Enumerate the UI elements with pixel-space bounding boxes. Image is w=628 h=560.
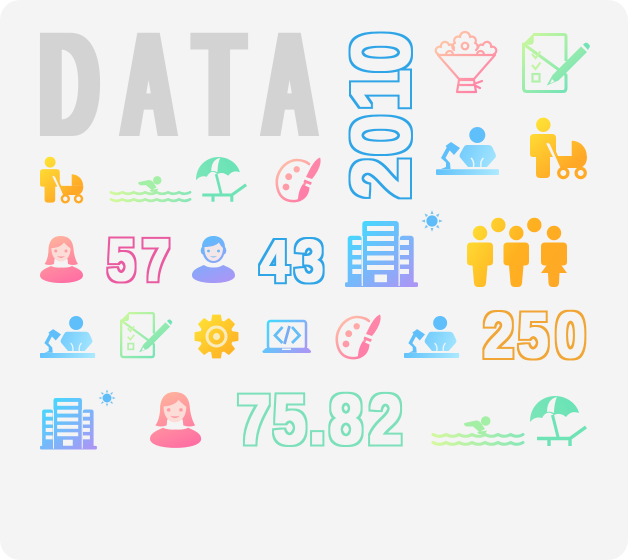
- icon: paint palette, row three: [337, 314, 381, 359]
- number 75.82: 75.82: [237, 380, 402, 459]
- icon: sun, large: [421, 210, 443, 232]
- icon: checklist and pen, row three: [121, 313, 172, 357]
- heading: DATA: A: [263, 1, 316, 169]
- icon: woman: [40, 236, 83, 283]
- icon: checklist and pen: [524, 34, 590, 92]
- icon: umbrella and lounger: [196, 157, 246, 202]
- number 250: 250: [483, 301, 586, 371]
- icon: gear: [195, 315, 238, 358]
- icon: laptop with code: [262, 321, 311, 353]
- icon: building, small: [40, 398, 97, 449]
- heading: DATA: A: [122, 1, 175, 169]
- icon: swimmer: [111, 176, 190, 201]
- icon: sun, small: [98, 389, 116, 407]
- icon: bouquet: [436, 32, 496, 92]
- heading: DATA: T: [194, 0, 244, 168]
- icon: group of people: [467, 218, 567, 287]
- number 43: 43: [260, 228, 324, 294]
- icon: person at desk, row three left: [40, 316, 95, 358]
- heading: DATA: D: [40, 1, 99, 168]
- icon: person at desk, row three right: [404, 316, 459, 358]
- rotated number 2010: 2010: [334, 31, 427, 199]
- icon: woman, large: [150, 392, 201, 448]
- icon: person at desk: [436, 127, 499, 175]
- icon: paint palette: [277, 158, 321, 202]
- icon: umbrella and lounger, large: [530, 396, 586, 446]
- icon: parent with stroller, large: [530, 118, 587, 178]
- icon: parent with stroller, small: [40, 157, 83, 203]
- number 57: 57: [108, 228, 170, 293]
- icon: man: [192, 236, 235, 283]
- icon: building, large: [345, 221, 418, 287]
- icon: swimmer, large: [433, 416, 523, 444]
- heading: DATA: [40, 0, 316, 169]
